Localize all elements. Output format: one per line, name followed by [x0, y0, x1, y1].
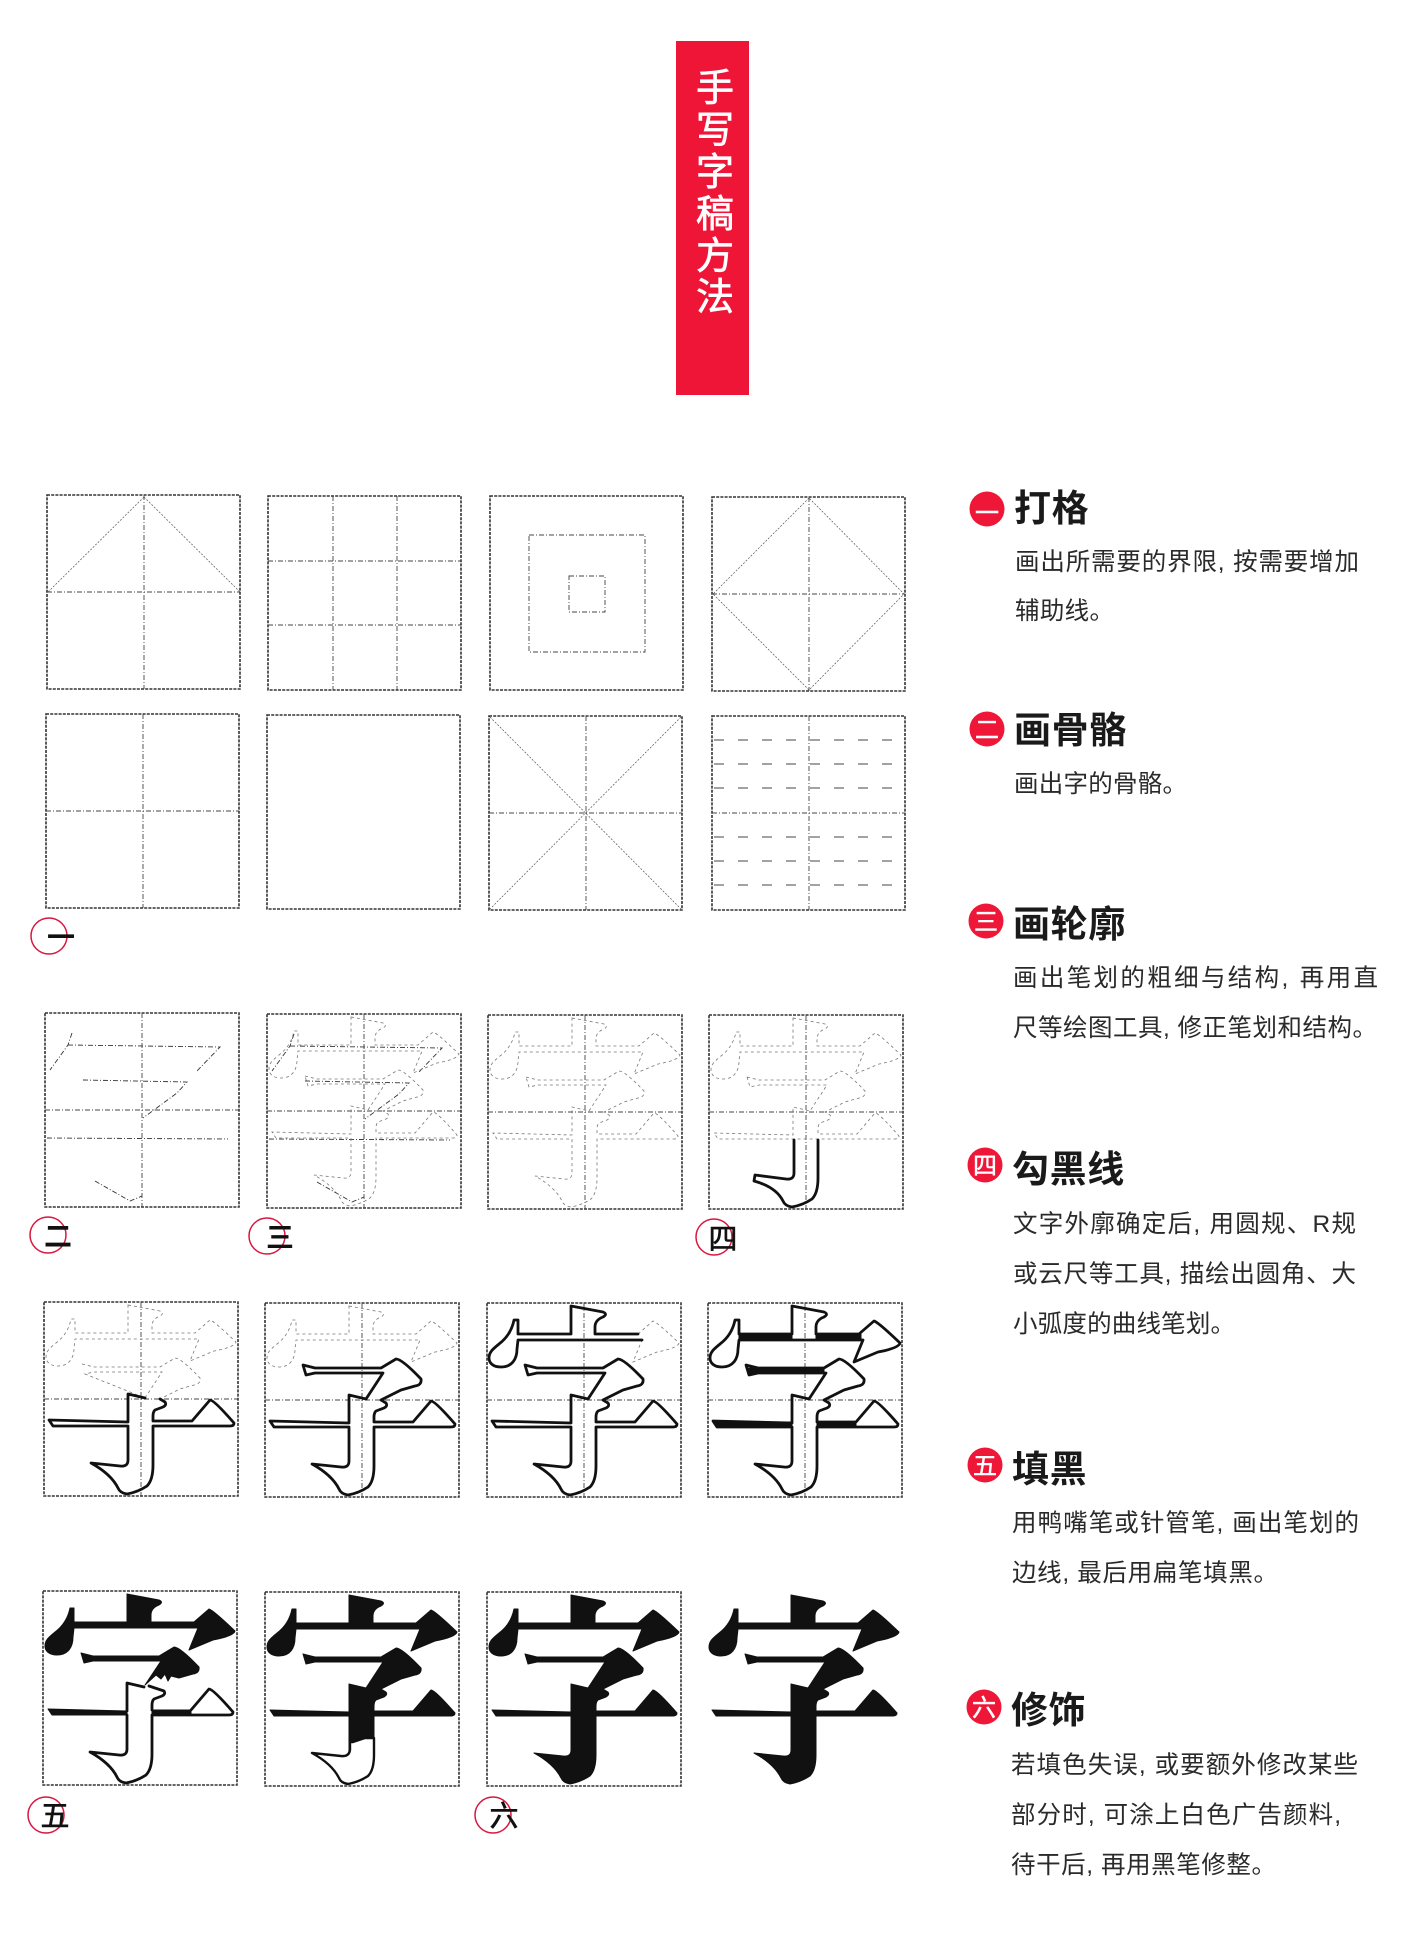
step label 2 — [30, 1217, 72, 1253]
grid: diamond guide — [712, 497, 905, 691]
panel: black fill and retouch boxes — [43, 1591, 899, 1786]
step label 1: 一 — [47, 922, 75, 953]
title banner: 手写字稿方法 — [696, 68, 734, 319]
badge 1 — [970, 492, 1004, 527]
grid: empty square — [267, 715, 460, 909]
body 6 — [1011, 1751, 1358, 1879]
body 5 — [1012, 1509, 1359, 1587]
grid: triangle guide — [47, 495, 240, 689]
heading 6: 修饰 — [1011, 1690, 1086, 1731]
box: middle stroke outlined — [265, 1303, 459, 1497]
panel: step 1 grid boxes — [46, 495, 905, 910]
badge 2 — [970, 712, 1004, 746]
body 5: 用鸭嘴笔或针管笔, 画出笔划的 — [1012, 1509, 1359, 1537]
box: first black outline on hook — [709, 1015, 903, 1209]
step label 6: 六 — [489, 1800, 519, 1833]
step 1 text — [970, 488, 1359, 625]
step label 4 — [696, 1219, 738, 1256]
body 6: 部分时, 可涂上白色广告颜料, — [1011, 1801, 1341, 1829]
step label 1 — [31, 918, 75, 954]
step label 3: 三 — [266, 1222, 294, 1253]
step label 3 — [249, 1218, 294, 1254]
heading 3: 画轮廓 — [1013, 904, 1126, 945]
heading 5: 填黑 — [1012, 1449, 1087, 1490]
badge 6: 六 — [972, 1695, 996, 1722]
badge 4: 四 — [973, 1153, 997, 1180]
box: top stroke and dot outlined — [487, 1303, 681, 1497]
title banner — [676, 41, 749, 395]
grid: nested squares — [490, 496, 683, 690]
panel: skeleton drawing boxes — [45, 1013, 903, 1209]
badge 2: 二 — [975, 717, 999, 744]
step 3 text — [968, 904, 1378, 1042]
badge 4 — [968, 1148, 1002, 1182]
box: skeleton lines — [45, 1013, 239, 1207]
grid: rice pattern — [489, 716, 682, 910]
step 5 text — [968, 1448, 1359, 1587]
grid: dashed rows — [712, 716, 905, 910]
grid: centre cross — [46, 714, 239, 908]
badge 1: 一 — [975, 500, 999, 527]
box: full outline with filled bars — [708, 1303, 902, 1497]
badge 3 — [968, 904, 1004, 938]
body 6: 待干后, 再用黑笔修整。 — [1011, 1851, 1276, 1879]
step label 4: 四 — [708, 1224, 738, 1256]
box: skeleton with rough outline — [267, 1014, 461, 1208]
panel: black outline boxes — [44, 1302, 902, 1497]
body 4 — [1013, 1210, 1356, 1338]
step label 6 — [475, 1797, 519, 1833]
body 5: 边线, 最后用扁笔填黑。 — [1012, 1559, 1278, 1587]
step 2 text — [970, 710, 1187, 798]
step 6 text — [966, 1690, 1358, 1879]
badge 6 — [966, 1690, 1002, 1724]
badge 3: 三 — [974, 909, 998, 936]
body 1: 辅助线。 — [1015, 597, 1114, 625]
body 3: 画出笔划的粗细与结构, 再用直 — [1013, 964, 1378, 992]
step label 5 — [28, 1797, 70, 1833]
box: lower stroke outlined — [44, 1302, 238, 1496]
body 3 — [1013, 964, 1378, 1042]
heading 2: 画骨骼 — [1014, 710, 1127, 751]
body 6: 若填色失误, 或要额外修改某些 — [1011, 1751, 1358, 1779]
box: filled glyph in frame — [487, 1592, 681, 1786]
body 2: 画出字的骨骼。 — [1014, 770, 1187, 798]
body 4: 小弧度的曲线笔划。 — [1013, 1310, 1235, 1338]
body 3: 尺等绘图工具, 修正笔划和结构。 — [1013, 1014, 1377, 1042]
badge 5 — [968, 1448, 1002, 1482]
box: most of the glyph filled — [265, 1592, 459, 1786]
body 1: 画出所需要的界限, 按需要增加 — [1015, 548, 1359, 576]
box: finished glyph without frame — [709, 1595, 899, 1784]
grid: nine squares — [268, 496, 461, 690]
body 4: 文字外廓确定后, 用圆规、R规 — [1013, 1210, 1356, 1238]
heading 1: 打格 — [1014, 488, 1089, 529]
step label 5: 五 — [40, 1801, 70, 1833]
box: cleaned outline sketch — [488, 1015, 682, 1209]
box: partial fill — [43, 1591, 237, 1785]
heading 4: 勾黑线 — [1012, 1149, 1125, 1190]
step label 2: 二 — [44, 1221, 72, 1252]
body 1 — [1015, 548, 1359, 625]
badge 5: 五 — [973, 1453, 997, 1480]
body 4: 或云尺等工具, 描绘出圆角、大 — [1013, 1260, 1356, 1288]
step 4 text — [968, 1148, 1356, 1338]
